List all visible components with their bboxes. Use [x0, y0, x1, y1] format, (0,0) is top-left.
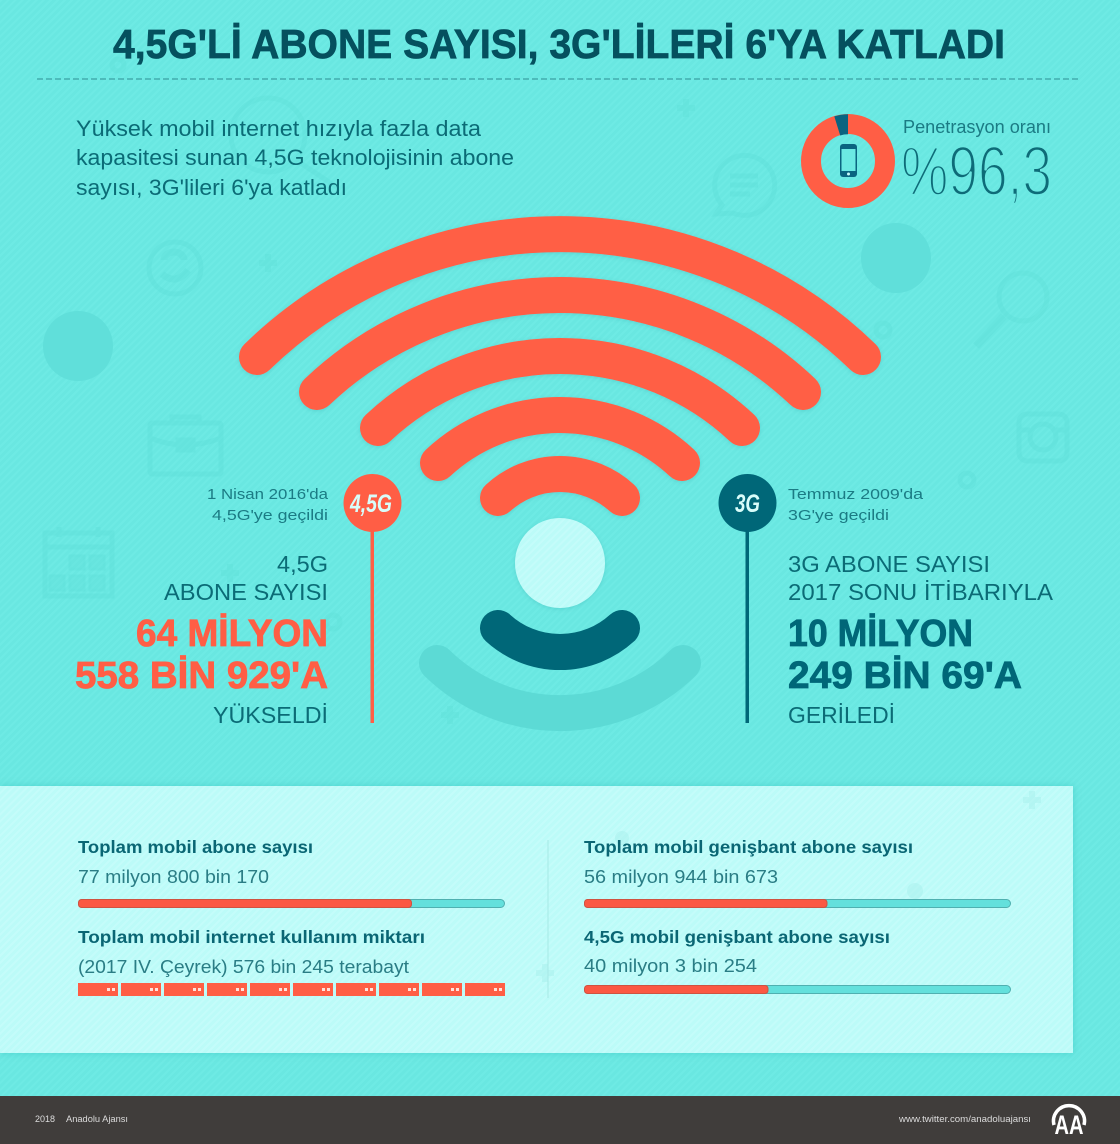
stat: 4,5G broadband: 4,5G mobil genişbant abone sayısı	[584, 927, 890, 947]
donut dark segment	[834, 114, 848, 136]
3G stats	[788, 551, 1054, 728]
4,5G date note: 1 Nisan 2016'da	[207, 486, 329, 503]
3G stats: 10 MİLYON	[788, 613, 973, 655]
4,5G stats: ABONE SAYISI	[164, 579, 328, 605]
arc 4	[317, 295, 803, 392]
title divider	[37, 78, 1081, 80]
stat: 4,5G broadband: 40 milyon 3 bin 254	[584, 955, 757, 976]
icon: chat bubble	[715, 155, 775, 215]
icon: smiley	[149, 242, 201, 294]
3G date note: Temmuz 2009'da	[788, 486, 924, 503]
background icons	[45, 59, 1067, 724]
pin: 3G: 3G	[735, 490, 760, 518]
4,5G stats: 4,5G	[277, 551, 328, 577]
icon: plus signs	[221, 99, 695, 724]
stat: mobile broadband	[584, 837, 1010, 908]
stat: internet usage	[78, 927, 505, 996]
logo: AA	[1054, 1106, 1085, 1140]
bar	[584, 986, 1010, 994]
stat: total subscribers: 77 milyon 800 bin 170	[78, 866, 269, 887]
panel divider	[547, 840, 549, 998]
penetration label: Penetrasyon oranı	[903, 117, 1051, 137]
arc 1	[498, 474, 622, 498]
3G date note	[788, 486, 924, 524]
stat: total subscribers	[78, 837, 504, 908]
title: 4,5G'Lİ ABONE SAYISI, 3G'LİLERİ 6'YA KATLADI	[113, 21, 1005, 67]
icon: solid circle right	[861, 223, 931, 293]
4,5G stats: 64 MİLYON	[136, 613, 328, 655]
stat: total subscribers: Toplam mobil abone sayısı	[78, 837, 313, 857]
pin: 4,5G: 4,5G	[349, 490, 392, 518]
3G date note: 3G'ye geçildi	[788, 507, 889, 524]
penetration value: %96,3	[901, 132, 1052, 210]
pin: 3G	[718, 474, 776, 723]
stat: 4,5G broadband	[584, 927, 1010, 994]
footer	[0, 1096, 1120, 1144]
icon: calendar	[45, 527, 112, 596]
intro text: kapasitesi sunan 4,5G teknolojisinin abone	[76, 145, 514, 170]
3G stats: 3G ABONE SAYISI	[788, 551, 990, 577]
intro text: Yüksek mobil internet hızıyla fazla data	[76, 116, 482, 141]
footer year: 2018	[35, 1114, 55, 1124]
stat: internet usage: Toplam mobil internet kullanım miktarı	[78, 927, 425, 947]
4,5G stats: YÜKSELDİ	[213, 702, 328, 728]
icon: briefcase	[150, 417, 221, 474]
stat: mobile broadband: Toplam mobil genişbant abone sayısı	[584, 837, 913, 857]
icon: right magnifier	[976, 273, 1047, 346]
4,5G date note: 4,5G'ye geçildi	[212, 507, 328, 524]
stat: mobile broadband: 56 milyon 944 bin 673	[584, 866, 778, 887]
arc 2	[438, 415, 682, 463]
3G stats: 249 BİN 69'A	[788, 655, 1022, 697]
icon: top magnifier	[231, 98, 338, 188]
arc 5	[257, 234, 863, 357]
logo: AA: AA	[1054, 1110, 1084, 1140]
arc 3	[378, 356, 742, 428]
center circle	[515, 518, 605, 608]
penetration donut	[811, 114, 885, 198]
bar	[584, 900, 1010, 908]
stat: internet usage: (2017 IV. Çeyrek) 576 bin 245 terabayt	[78, 956, 409, 977]
icon: small rings	[112, 59, 974, 629]
icon: solid circle left	[43, 311, 113, 381]
segmented usage bar	[78, 983, 505, 996]
bar	[78, 900, 504, 908]
panel faint marks	[536, 791, 1041, 982]
4,5G stats	[75, 551, 328, 728]
footer link: www.twitter.com/anadoluajansı	[898, 1114, 1031, 1125]
intro text	[76, 116, 514, 200]
3G stats: 2017 SONU İTİBARIYLA	[788, 579, 1054, 605]
pin: 4,5G	[344, 474, 402, 723]
3G stats: GERİLEDİ	[788, 702, 895, 728]
4,5G date note	[207, 486, 329, 524]
4,5G stats: 558 BİN 929'A	[75, 655, 328, 697]
intro text: sayısı, 3G'lileri 6'ya katladı	[76, 175, 347, 200]
dark arc	[498, 628, 622, 652]
footer credit: Anadolu Ajansı	[66, 1114, 128, 1124]
wifi arcs	[257, 234, 863, 713]
pale arc	[437, 663, 683, 713]
icon: phone	[840, 144, 857, 177]
panel: summary	[0, 786, 1073, 1053]
icon: instagram	[1019, 414, 1067, 461]
